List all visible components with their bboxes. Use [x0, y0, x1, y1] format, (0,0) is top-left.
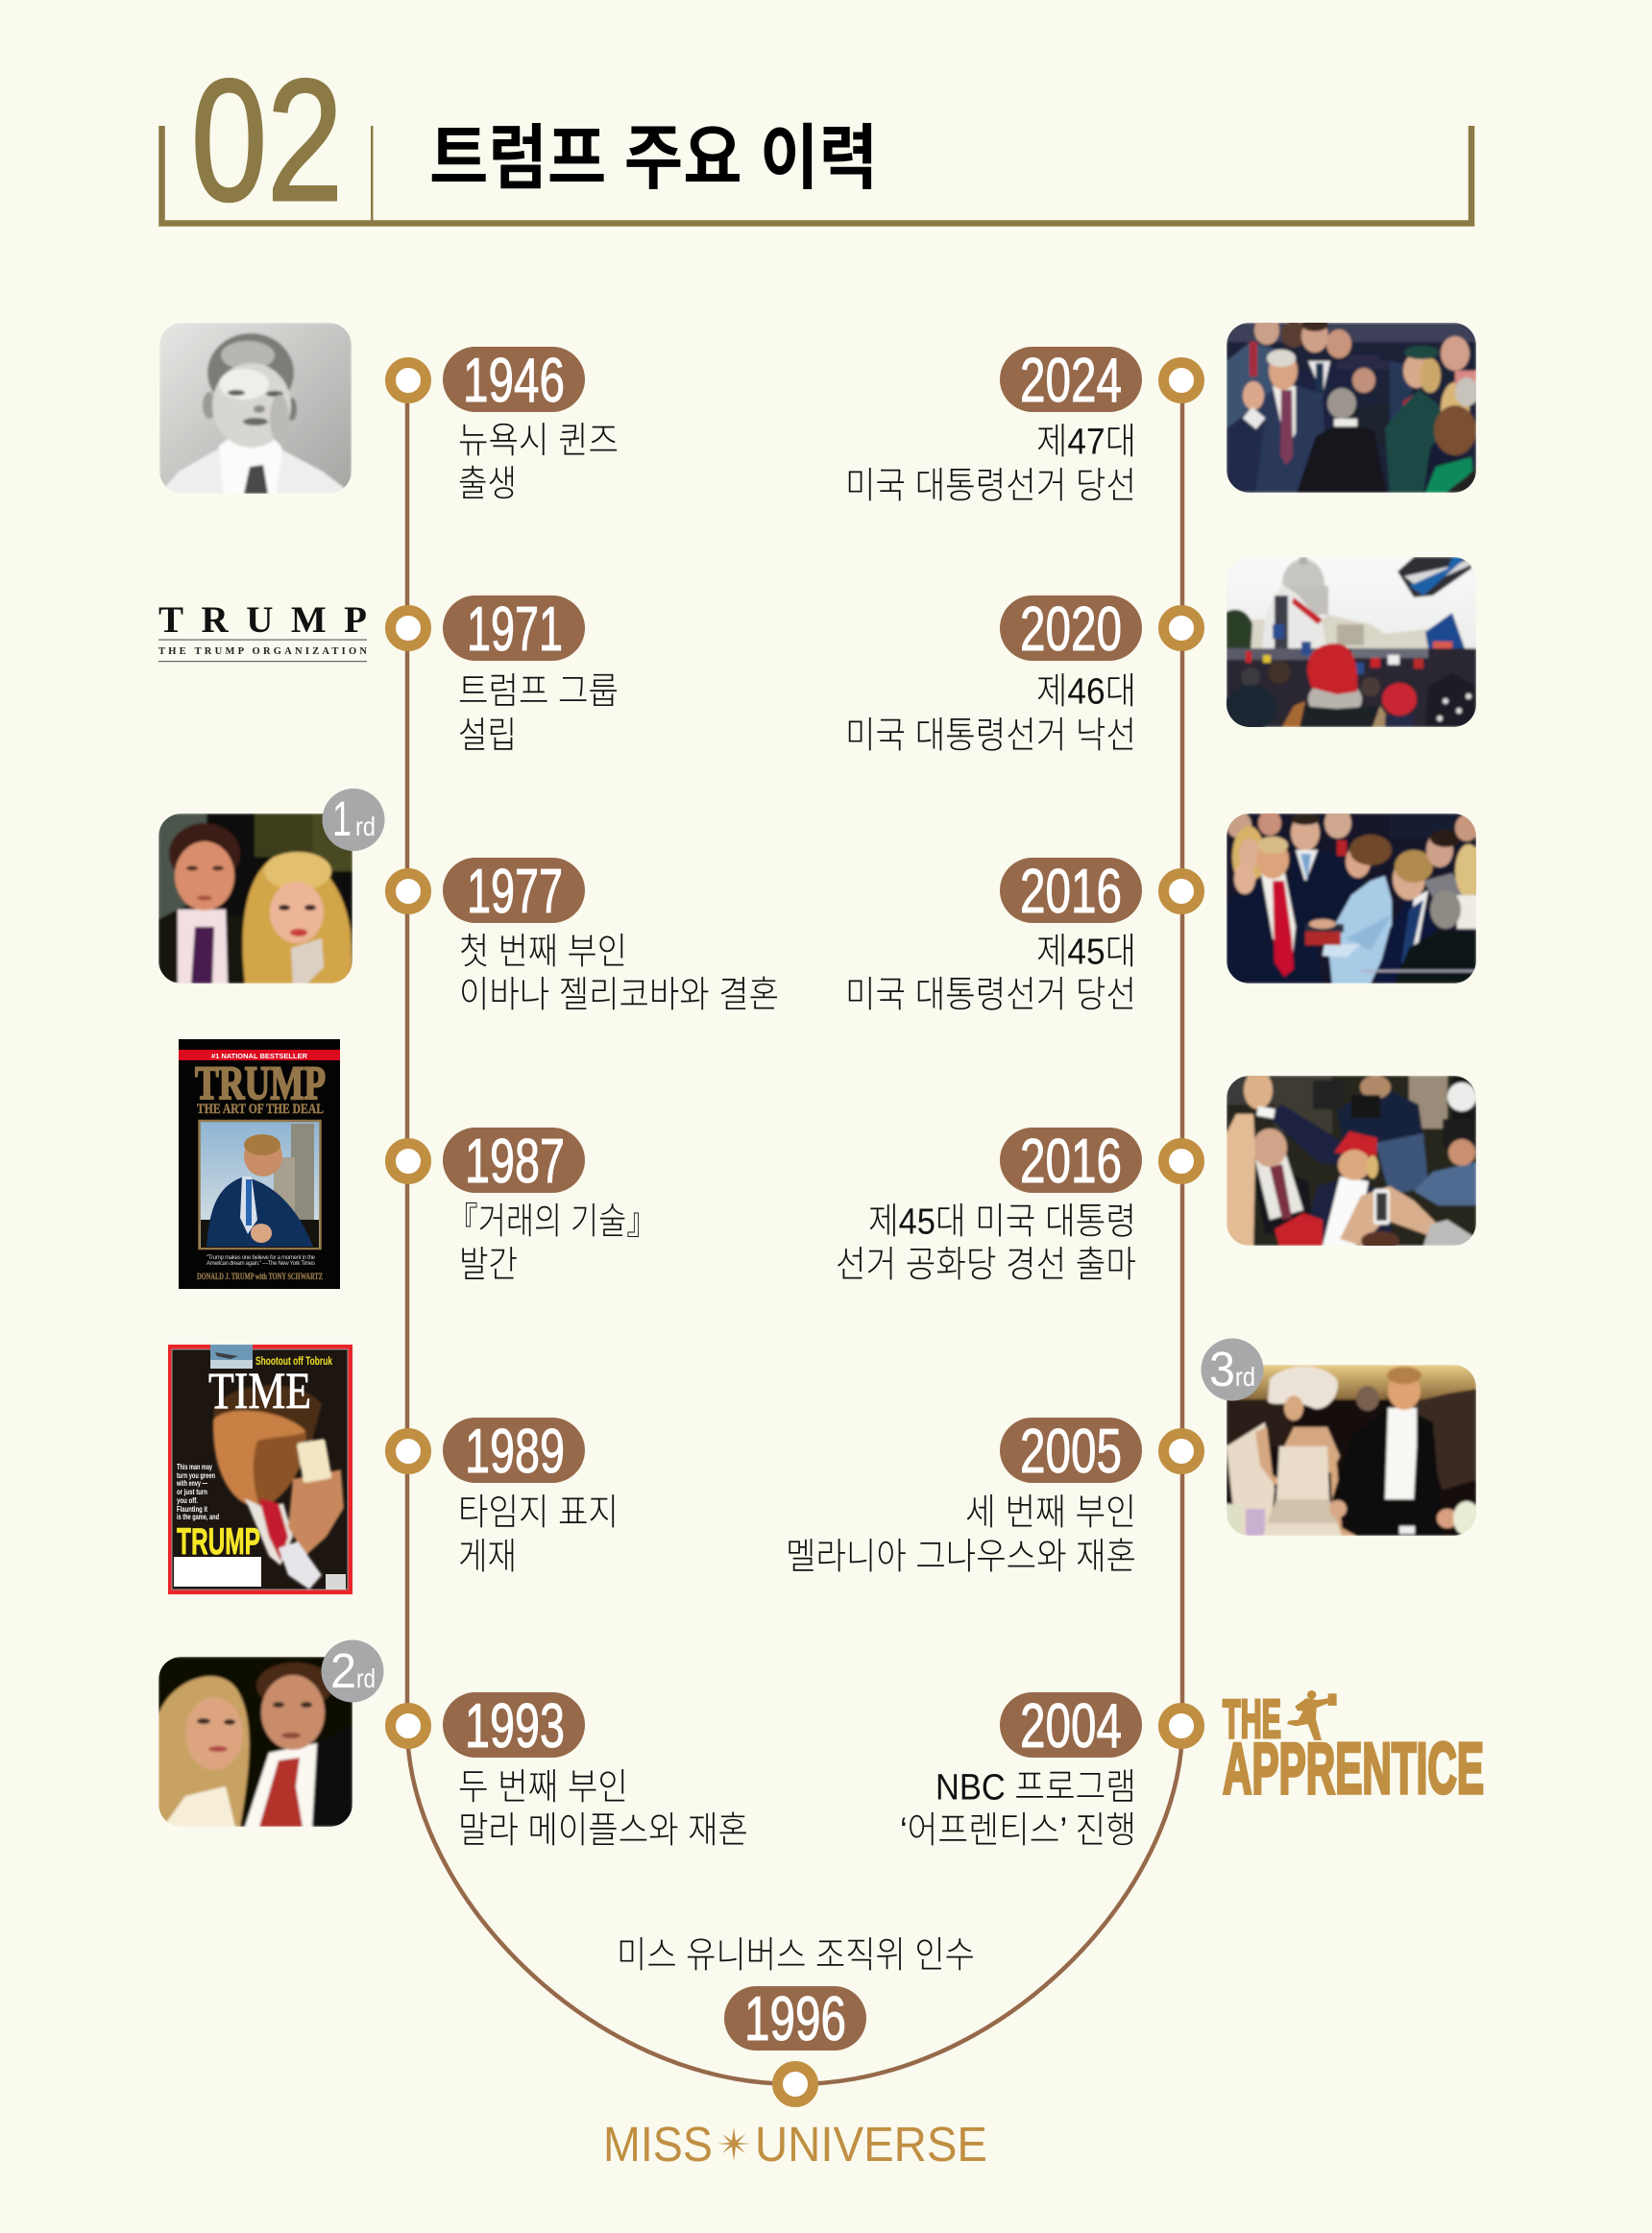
book cover: The Art of the Deal: THE ART OF THE DEAL — [197, 1102, 324, 1117]
photo: 2016 campaign — [1227, 1071, 1476, 1250]
logo: Trump Organization: THE TRUMP ORGANIZATION — [158, 646, 367, 657]
book cover: The Art of the Deal: "Trump makes one believe for a moment in the — [206, 1255, 316, 1261]
description: 제46대 — [1036, 672, 1136, 713]
description: 미스 유니버스 조직위 인수 — [617, 1936, 975, 1977]
year pill: 2020 — [1020, 594, 1122, 664]
description: 제45대 미국 대통령 — [868, 1202, 1136, 1243]
event: 1993 second marriage — [390, 1690, 748, 1852]
marker — [390, 874, 426, 909]
magazine cover: TIME: This man may — [177, 1463, 212, 1471]
event: 2004 The Apprentice — [900, 1690, 1199, 1852]
event: 1987 book — [390, 1126, 657, 1285]
description: 선거 공화당 경선 출마 — [836, 1245, 1136, 1285]
description: 『거래의 기술』 — [448, 1202, 657, 1243]
badge: third marriage: rd — [1235, 1362, 1255, 1392]
marker — [1164, 1143, 1199, 1179]
marker — [390, 1143, 426, 1179]
marker — [390, 611, 426, 645]
photo: third wife wedding — [1227, 1365, 1480, 1536]
marker — [390, 1433, 426, 1469]
photo: 2020 Capitol crowd — [1224, 557, 1476, 731]
logo: Miss Universe — [603, 2117, 987, 2172]
magazine cover: TIME: or just turn — [177, 1488, 207, 1496]
description: 첫 번째 부인 — [459, 932, 627, 972]
description: 타임지 표지 — [458, 1493, 619, 1533]
description — [459, 932, 779, 1016]
magazine cover: TIME: with envy — — [176, 1479, 207, 1488]
year pill: 2005 — [1020, 1416, 1122, 1486]
section header — [161, 44, 1471, 237]
photo: second wife — [158, 1657, 352, 1827]
badge: second marriage — [321, 1640, 384, 1702]
badge: first marriage: 1 — [332, 791, 352, 846]
magazine cover: TIME — [168, 1345, 352, 1594]
marker — [1164, 1433, 1199, 1469]
description: 뉴욕시 퀸즈 — [458, 421, 619, 461]
description — [458, 1493, 619, 1577]
event: 2024 elected — [845, 345, 1199, 507]
magazine cover: TIME: you off. — [177, 1496, 198, 1505]
description: 트럼프 그룹 — [458, 672, 619, 713]
description — [900, 1767, 1136, 1852]
year pill: 1971 — [467, 594, 563, 664]
logo: Miss Universe: MISS — [603, 2117, 713, 2172]
logo: Miss Universe: UNIVERSE — [755, 2117, 987, 2172]
event: 2020 defeated — [845, 594, 1199, 757]
icon: running man with briefcase — [1287, 1690, 1337, 1740]
description: 미국 대통령선거 당선 — [845, 467, 1136, 507]
magazine cover: TIME: Shootout off Tobruk — [255, 1354, 332, 1368]
magazine cover: TIME: turn you green — [177, 1471, 215, 1480]
description — [448, 1202, 657, 1285]
description — [836, 1202, 1136, 1285]
event: 2016 elected — [845, 856, 1199, 1016]
event: 1989 TIME — [390, 1416, 619, 1577]
description: 멜라니아 그나우스와 재혼 — [786, 1537, 1136, 1577]
book cover: The Art of the Deal: TRUMP — [195, 1056, 326, 1109]
description: 제45대 — [1036, 932, 1136, 972]
event: 1971 Trump Group — [390, 594, 619, 757]
badge: first marriage — [323, 789, 384, 851]
description: NBC 프로그램 — [935, 1767, 1136, 1808]
event: 2005 third marriage — [786, 1416, 1199, 1577]
photo: 2016 inauguration — [1227, 808, 1482, 983]
year pill: 1993 — [465, 1690, 565, 1760]
photo: childhood portrait — [159, 323, 352, 494]
description: 설립 — [458, 716, 517, 757]
description: 두 번째 부인 — [458, 1767, 628, 1808]
timeline line — [407, 380, 1182, 2084]
marker — [778, 2067, 813, 2101]
description — [845, 672, 1136, 757]
year pill: 1987 — [465, 1126, 565, 1196]
description — [458, 1767, 748, 1852]
header divider — [371, 126, 373, 222]
marker — [390, 363, 426, 398]
title: 트럼프 주요 이력 — [429, 118, 878, 198]
book cover: The Art of the Deal: American dream again." —The New York Times — [206, 1261, 315, 1267]
description — [845, 932, 1136, 1016]
description: 제47대 — [1036, 423, 1136, 463]
description: 세 번째 부인 — [965, 1493, 1136, 1533]
logo: Trump Organization: TRUMP — [158, 599, 367, 641]
description — [458, 672, 619, 757]
description: 이바나 젤리코바와 결혼 — [459, 976, 779, 1016]
badge: second marriage: rd — [356, 1663, 376, 1693]
description: 말라 메이플스와 재혼 — [458, 1811, 748, 1852]
section number: 02 — [191, 44, 343, 237]
header frame — [161, 126, 1471, 223]
year pill: 2004 — [1020, 1690, 1122, 1760]
badge: third marriage — [1201, 1339, 1264, 1400]
description — [786, 1493, 1136, 1577]
year pill: 1989 — [465, 1416, 565, 1486]
year pill: 2016 — [1020, 1126, 1122, 1196]
event: 1977 first marriage — [390, 856, 779, 1016]
description — [845, 423, 1136, 507]
photo: 2024 inauguration — [1227, 316, 1478, 493]
description: 게재 — [458, 1537, 517, 1577]
description: 미국 대통령선거 당선 — [845, 976, 1136, 1016]
year pill: 1977 — [467, 856, 563, 926]
marker — [1164, 363, 1199, 398]
year pill: 2024 — [1020, 345, 1122, 415]
photo: first wife wedding portrait — [158, 813, 352, 983]
marker — [390, 1708, 426, 1744]
description: ‘어프렌티스’ 진행 — [900, 1811, 1136, 1852]
description: 출생 — [458, 465, 517, 505]
book cover: The Art of the Deal: DONALD J. TRUMP with TONY SCHWARTZ — [197, 1272, 323, 1281]
marker — [1164, 1708, 1199, 1744]
marker — [1164, 874, 1199, 909]
year pill: 1946 — [463, 345, 565, 415]
description — [458, 421, 619, 505]
book cover: The Art of the Deal — [179, 1039, 340, 1289]
logo: The Apprentice — [1223, 1688, 1484, 1808]
marker — [1164, 611, 1199, 645]
magazine cover: TIME: TRUMP — [177, 1521, 260, 1563]
description: 미국 대통령선거 낙선 — [845, 716, 1136, 757]
magazine cover: TIME: TIME — [208, 1362, 311, 1420]
year pill: 1996 — [744, 1983, 846, 2053]
badge: first marriage: rd — [355, 812, 376, 841]
book cover: The Art of the Deal: #1 NATIONAL BESTSELLER — [211, 1052, 308, 1060]
year pill: 2016 — [1020, 856, 1122, 926]
event: 2016 nomination — [836, 1126, 1199, 1285]
description: 발간 — [459, 1245, 518, 1285]
event: 1946 birth — [390, 345, 619, 505]
event: 1996 Miss Universe — [603, 1936, 987, 2172]
magazine cover: TIME: Flaunting it — [177, 1505, 207, 1514]
logo: Trump Organization — [158, 599, 367, 662]
badge: third marriage: 3 — [1209, 1342, 1235, 1396]
logo: The Apprentice: THE — [1223, 1688, 1281, 1750]
badge: second marriage: 2 — [330, 1643, 356, 1698]
magazine cover: TIME: is the game, and — [177, 1513, 219, 1521]
